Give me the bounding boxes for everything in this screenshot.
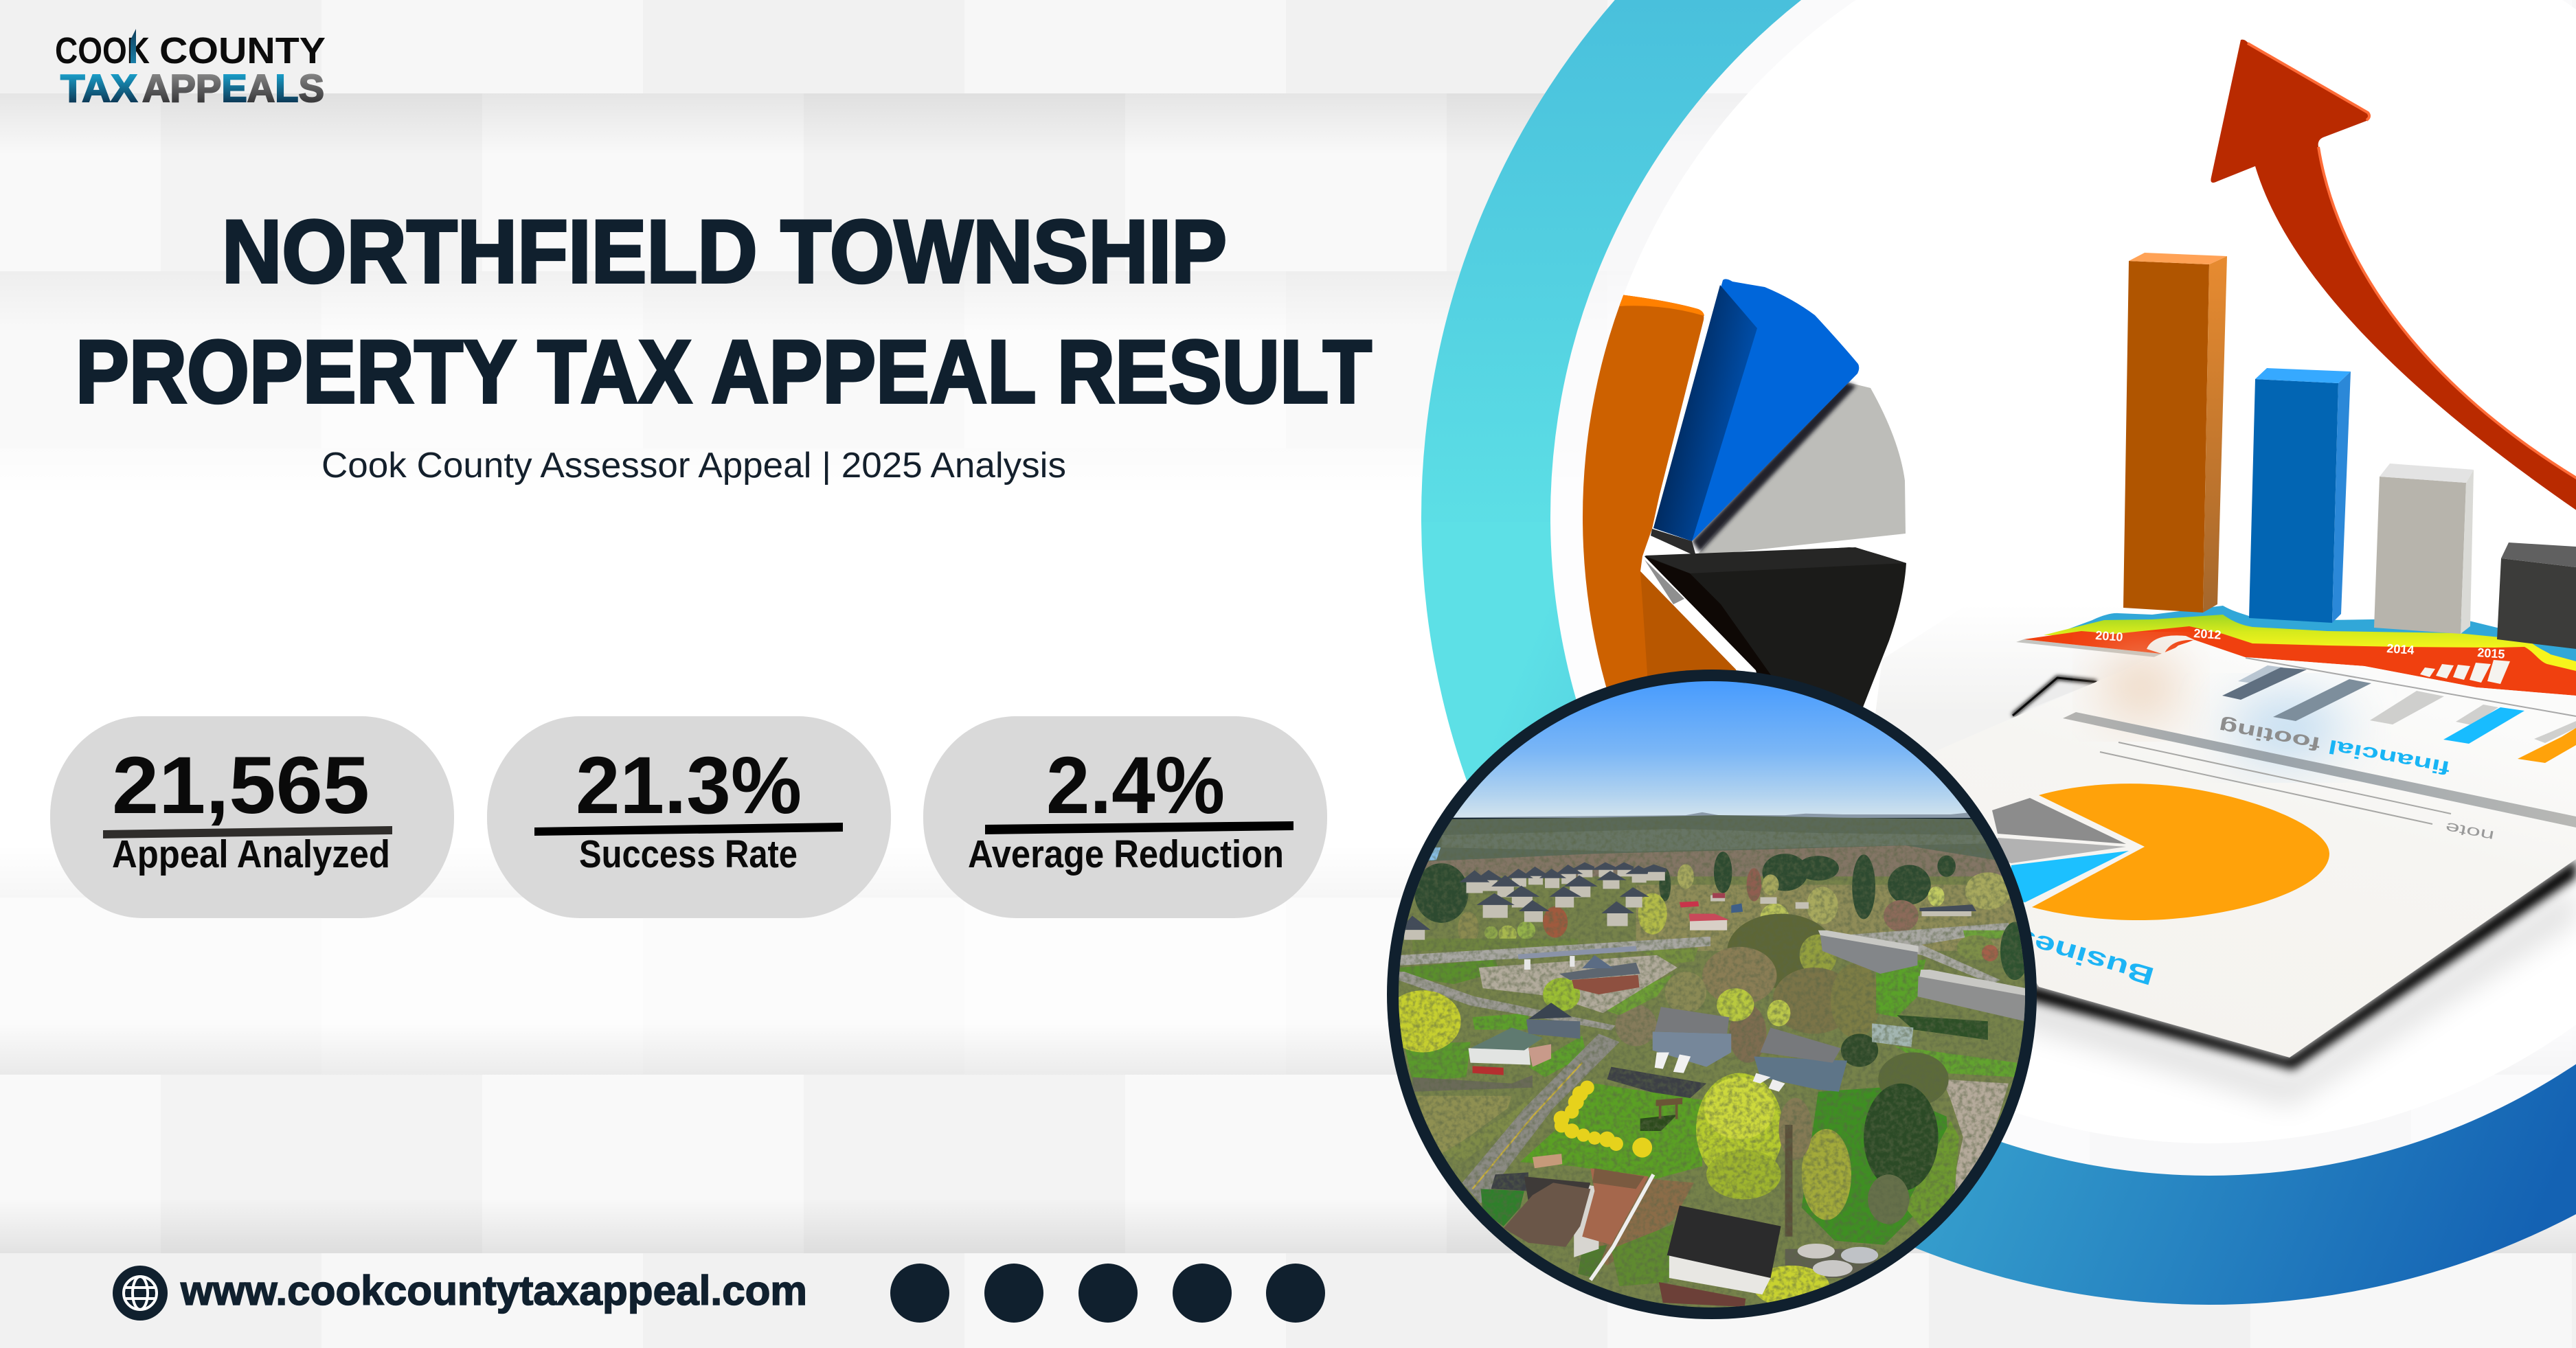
- report pie chart: [1992, 784, 2329, 920]
- icon: globe: [113, 1266, 168, 1321]
- panel: 3D business charts photo: [1566, 0, 2576, 1143]
- stat label: Success Rate: [579, 832, 798, 876]
- logo word: Appeals: APPEALS: [142, 67, 324, 111]
- logo: [55, 29, 326, 111]
- sky: [1388, 670, 2037, 818]
- right lawn: [1802, 1088, 1951, 1245]
- title line 1: NORTHFIELD TOWNSHIP: [222, 201, 1227, 301]
- aerial photo of township in circle: [1385, 670, 2037, 1319]
- year labels: [2095, 629, 2505, 659]
- decorative ring: blue lower part: [1421, 522, 2576, 1305]
- logo word: Tax: TAX: [60, 67, 137, 111]
- title line 2: PROPERTY TAX APPEAL RESULT: [76, 321, 1372, 422]
- dark roof house: [1659, 1205, 1781, 1307]
- grey house: [1526, 1003, 1580, 1039]
- centre duplex two: [1753, 1027, 1847, 1092]
- bar chart: floor color strip: [2016, 606, 2576, 696]
- stat label: Appeal Analyzed: [112, 832, 390, 876]
- stat label: Average Reduction: [968, 832, 1284, 876]
- foreground ground patches: [1586, 1178, 1694, 1266]
- report text: business: Business: [1991, 917, 2157, 991]
- diagonal road: [1462, 1033, 1620, 1203]
- stat number: 21.3%: [576, 740, 802, 831]
- pie chart 3D: blue slice: [1653, 279, 1859, 541]
- year labels: 2015: [2477, 646, 2505, 661]
- logo accent on K: [131, 29, 136, 63]
- big yellow tree: [1696, 1073, 1783, 1185]
- report heading band and lines: [2063, 712, 2576, 827]
- back sheet of paper: [1875, 668, 2101, 753]
- stat pill: average reduction: [923, 716, 1327, 918]
- pie chart 3D: grey slice: [1651, 382, 1906, 556]
- yellow hedge row: [1554, 1080, 1652, 1158]
- year labels: 2014: [2386, 641, 2415, 657]
- ground base: [1388, 876, 2037, 1318]
- mini white bars: [2420, 660, 2510, 684]
- bare woods: [1412, 845, 2021, 902]
- stat number: 21,565: [112, 740, 370, 831]
- red pickup: [1473, 1066, 1504, 1075]
- forest hill: [1412, 815, 2017, 876]
- distant mountains: [1429, 812, 2009, 818]
- bar chart: grey bar: [2374, 464, 2474, 634]
- lawns: [1876, 959, 1926, 1017]
- pie chart 3D: black slice: [1645, 547, 1906, 714]
- driveway: [1607, 1067, 1706, 1102]
- year labels: 2012: [2193, 626, 2222, 642]
- pie chart 3D: orange slice: [1583, 295, 1737, 687]
- village houses walls: [1404, 868, 1971, 940]
- light spring trees: [1677, 864, 2011, 924]
- centre lawn: [1520, 1084, 1702, 1178]
- icon: red growth arrow: [2211, 40, 2576, 511]
- foreground paper sheet: [1910, 640, 2576, 1058]
- centre duplex one: [1653, 1007, 1731, 1073]
- gas station: [1518, 946, 1640, 994]
- evergreen group: [1878, 1052, 1949, 1106]
- report bars: [2222, 658, 2576, 763]
- field left: [1416, 1096, 1512, 1154]
- gas station lot: [1479, 955, 1677, 1013]
- stat pill: appeals analyzed: [50, 716, 454, 918]
- website url: www.cookcountytaxappeal.com: [180, 1268, 807, 1314]
- social icon dots: [890, 1264, 1325, 1323]
- foliage texture: [1388, 819, 2037, 1318]
- olive trees: [1802, 1129, 1851, 1220]
- dark pines: [1414, 852, 1956, 923]
- main village road: [1400, 937, 1710, 966]
- yellow trees: [1385, 990, 1461, 1052]
- title: [76, 201, 1372, 422]
- report text: financial footing: financial footing: [2217, 716, 2452, 779]
- bar chart: blue bar: [2249, 368, 2351, 623]
- stat number: 2.4%: [1046, 740, 1225, 831]
- pergola: [1656, 1098, 1682, 1119]
- stat pill: success rate: [487, 716, 891, 918]
- parked cars: [1798, 1244, 1878, 1277]
- bench: [1533, 1154, 1562, 1168]
- subtitle: Cook County Assessor Appeal | 2025 Analysis: [321, 446, 1066, 485]
- upper right road and grounds: [1851, 923, 2009, 984]
- apartment block two: [1917, 970, 2026, 1021]
- logo word: Cook: COOK: [55, 30, 150, 71]
- left white house: [1469, 1027, 1551, 1067]
- year labels: 2010: [2095, 628, 2123, 644]
- red roof buildings: [1680, 893, 1743, 930]
- foreground paper shadow: [2020, 859, 2576, 1070]
- bar chart: orange bar: [2123, 253, 2227, 613]
- decorative ring: teal upper part: [1421, 0, 1801, 522]
- village houses roofs: [1403, 864, 1974, 928]
- pond: [1872, 1023, 1913, 1047]
- brown roof house: [1504, 1168, 1653, 1280]
- tan drive: [1943, 1079, 2009, 1195]
- mid woodland: [1727, 914, 1835, 988]
- bar chart: dark bar: [2497, 542, 2576, 649]
- yellow tree bottom: [1753, 1266, 1829, 1307]
- foreground paper wide soft shadow: [2013, 886, 2576, 1106]
- logo word: County: COUNTY: [159, 30, 326, 71]
- report text: note: note: [2444, 819, 2496, 845]
- apartment block one: [1818, 930, 1919, 974]
